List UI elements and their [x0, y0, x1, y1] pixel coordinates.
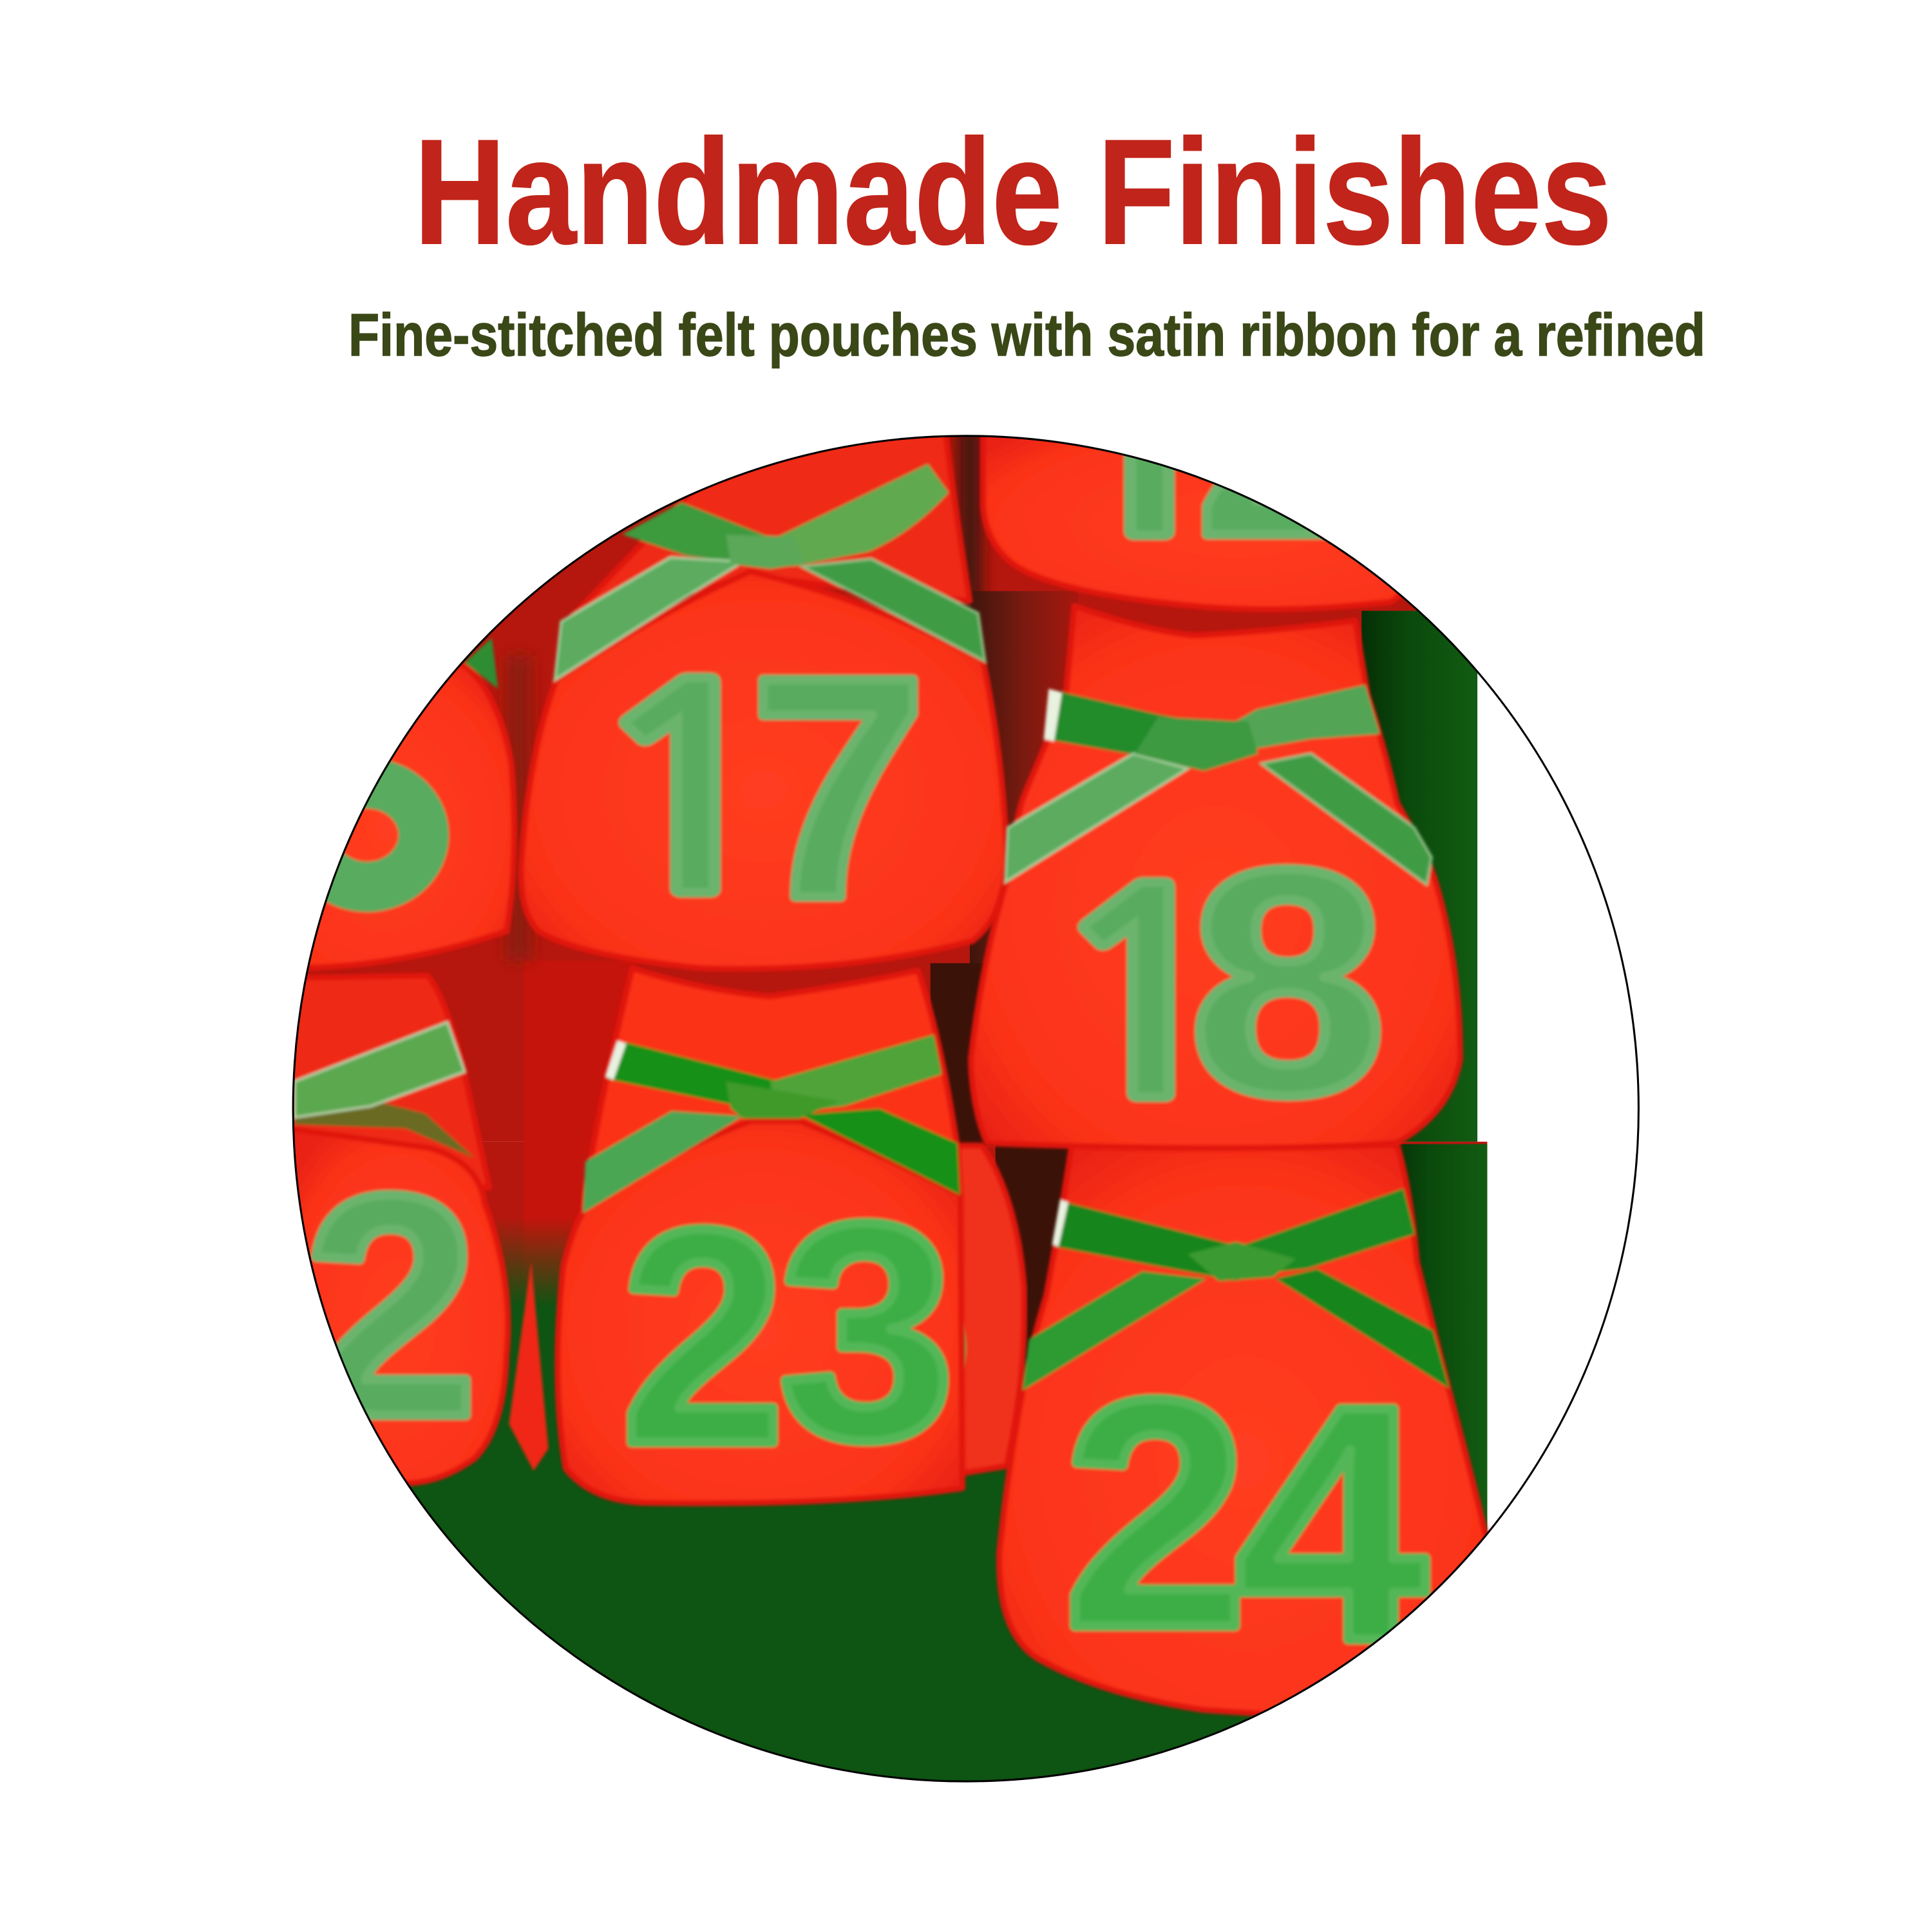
pouch 24 — [999, 1144, 1490, 1719]
number 17 — [616, 670, 921, 904]
circle outline — [293, 436, 1638, 1781]
partial felt digit on pouch 16 — [310, 783, 424, 887]
number 12: 2 — [1197, 267, 1364, 598]
red sliver pouch between 22 and 23 — [509, 1262, 549, 1471]
number 24 — [1063, 1332, 1429, 1711]
circular photo of numbered felt pouches — [292, 435, 1640, 1783]
pouch 22 — [287, 976, 508, 1483]
pouch 23 — [558, 968, 962, 1508]
number 22, second digit: 2 — [303, 1130, 478, 1482]
ribbon on pouch 18 — [1005, 685, 1432, 884]
ribbon on pouch 23 — [583, 1035, 960, 1213]
number 12 — [1121, 455, 1326, 543]
pouch behind 23 — [947, 1146, 1024, 1476]
number 17: 1 — [579, 655, 796, 934]
number 23 — [621, 1160, 955, 1508]
number 18 — [1040, 804, 1387, 1161]
ribbon on pouch 17 — [554, 464, 985, 680]
number 12: 1 — [1033, 298, 1250, 577]
number 18: 8 — [1189, 804, 1387, 1161]
ribbon on pouch 24 — [1023, 1188, 1450, 1390]
pouch 16 — [308, 636, 519, 972]
number 18: 1 — [1040, 859, 1247, 1139]
number 23: 2 — [621, 1166, 785, 1508]
number 23: 3 — [779, 1160, 955, 1504]
title: Handmade Finishes — [414, 109, 1612, 276]
subtitle: Fine-stitched felt pouches with satin ribbon for a refined — [348, 301, 1705, 368]
ribbon fragment on pouch 16 — [464, 638, 498, 688]
pouch 18 — [971, 606, 1460, 1161]
number 24: 4 — [1235, 1337, 1429, 1711]
number 24: 2 — [1063, 1332, 1248, 1696]
ribbon on pouch 22 — [294, 1023, 464, 1117]
number 17: 7 — [750, 611, 927, 963]
pouch 12 at top — [978, 437, 1403, 613]
pouch 17 — [521, 428, 1007, 969]
photo backdrop — [307, 437, 1488, 1780]
